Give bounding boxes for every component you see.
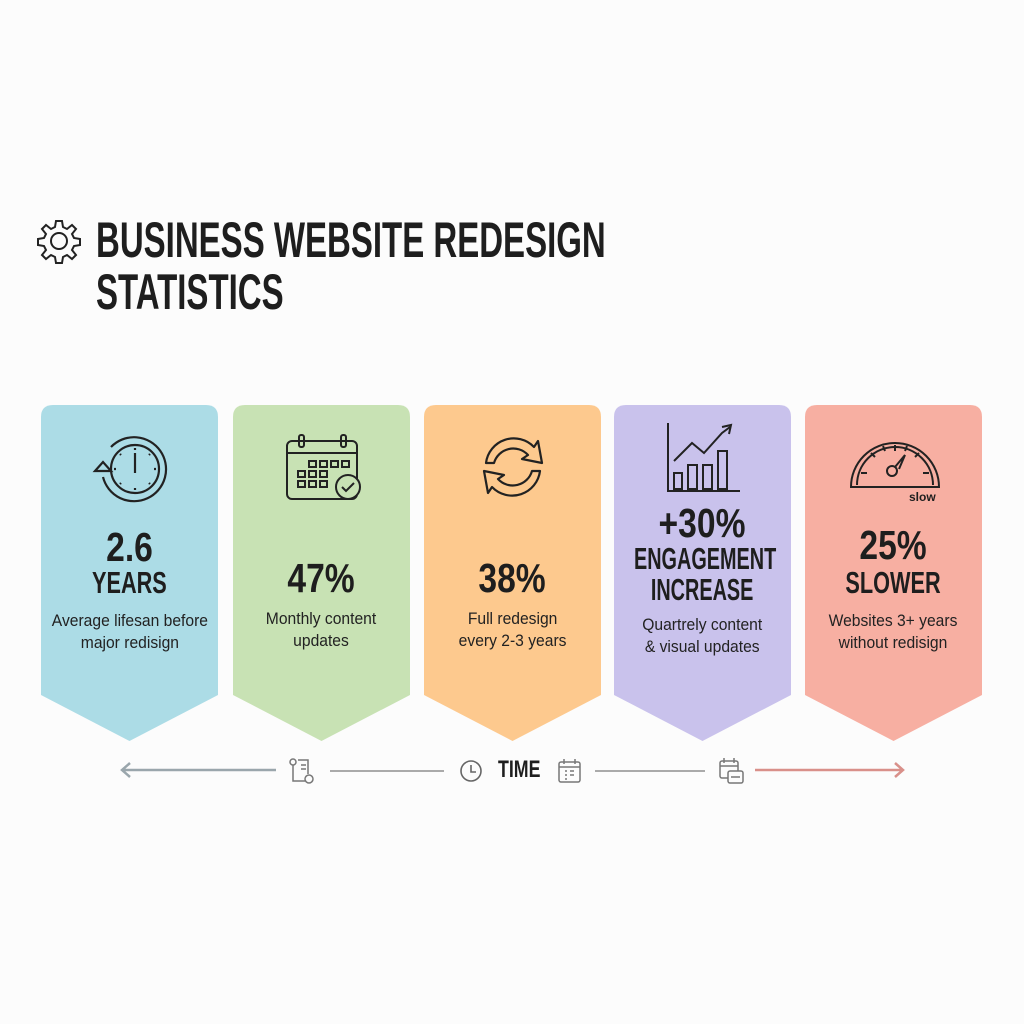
panel: lifespan: 2.6 [106, 524, 153, 570]
icon: calendar check [286, 434, 361, 500]
panel: slower: slow [909, 490, 936, 504]
icon: gear [37, 220, 81, 264]
panel: full redesign: Full redesign [468, 609, 557, 628]
arrow: left [120, 762, 276, 778]
panel: monthly updates: Monthly content [266, 609, 377, 628]
panel: lifespan: YEARS [92, 565, 167, 600]
panel: lifespan: Average lifesan before [51, 611, 208, 630]
title: BUSINESS WEBSITE REDESIGN [96, 212, 606, 268]
icon: speedometer [850, 442, 940, 488]
panel: monthly updates [233, 405, 410, 741]
title [37, 212, 606, 320]
panel: engagement: ENGAGEMENT [634, 541, 776, 576]
panel: full redesign: 38% [479, 555, 546, 601]
icon: checklist [289, 758, 314, 784]
panel: engagement: Quartrely content [643, 615, 762, 634]
panel: slower: SLOWER [846, 565, 941, 600]
panel: slower: without redisign [839, 633, 948, 652]
panel: monthly updates: 47% [288, 555, 355, 601]
icon: calendars [719, 758, 744, 784]
panel: full redesign: every 2-3 years [459, 631, 566, 650]
panel: monthly updates: updates [294, 631, 349, 650]
panel: slower [805, 405, 982, 741]
panel: engagement: +30% [659, 500, 746, 546]
panel: lifespan [41, 405, 218, 741]
icon: bar chart growth [667, 423, 740, 492]
timeline [120, 756, 905, 784]
arrow: right [755, 762, 905, 778]
icon: clock refresh [92, 436, 168, 502]
panel: slower: 25% [860, 522, 927, 568]
panel: engagement [614, 405, 791, 741]
icon: refresh arrows [482, 437, 544, 497]
timeline label: TIME [498, 756, 540, 783]
panel: slower: Websites 3+ years [829, 611, 958, 630]
icon: calendar [558, 759, 581, 783]
panel: engagement: & visual updates [645, 637, 760, 656]
icon: clock [460, 760, 482, 782]
title: STATISTICS [96, 264, 284, 320]
panel: engagement: INCREASE [651, 572, 754, 607]
panel: full redesign [424, 405, 601, 741]
panel: lifespan: major redisign [80, 633, 179, 652]
